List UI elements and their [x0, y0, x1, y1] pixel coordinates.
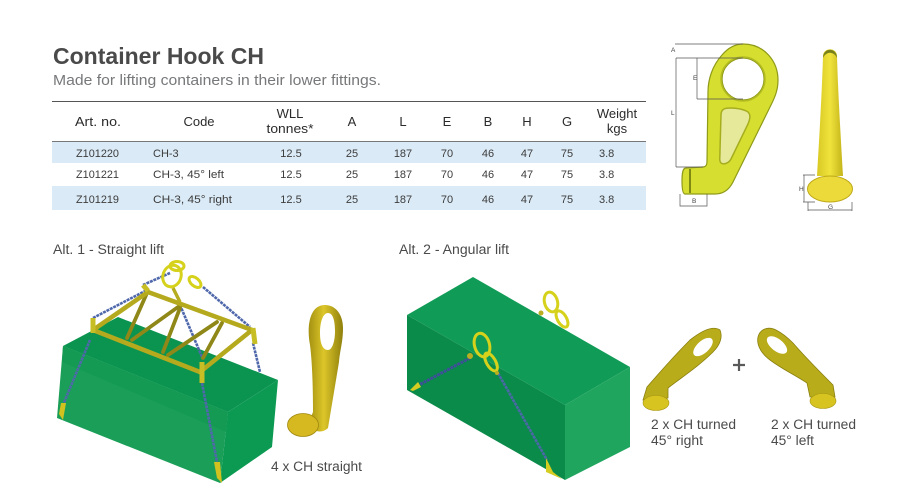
icon: hook turned 45 degrees left [758, 328, 836, 408]
table row Z101220: 187 [394, 148, 412, 160]
table row Z101221: CH-3, 45° left [153, 169, 224, 181]
dimension lines [799, 175, 852, 211]
dimension lines: L [671, 110, 675, 117]
diagram: angular lift [407, 277, 630, 480]
table row Z101219: 25 [346, 194, 358, 206]
table row Z101221: 25 [346, 169, 358, 181]
table row Z101220: 75 [561, 148, 573, 160]
caption: 2 x CH turned 45 right [651, 417, 736, 448]
caption: 2 x CH turned 45 left [771, 417, 856, 448]
table row Z101221: Z101221 [76, 169, 119, 181]
heading: alt 1: Alt. 1 - Straight lift [53, 242, 164, 257]
table row Z101221: 75 [561, 169, 573, 181]
caption: 2 x CH turned 45 right: 2 x CH turned [651, 417, 736, 432]
table row Z101219: 47 [521, 194, 533, 206]
table header: Art. no. [75, 114, 121, 129]
table row Z101219: CH-3, 45° right [153, 194, 232, 206]
dimension lines: H [799, 186, 804, 193]
rear lifting rings [538, 291, 570, 329]
front lifting rings [467, 331, 500, 375]
dimension lines [671, 44, 743, 206]
table row Z101220 [76, 148, 614, 160]
table header [75, 106, 637, 136]
caption: 2 x CH turned 45 left: 2 x CH turned [771, 417, 856, 432]
subtitle: Made for lifting containers in their lower fittings. [53, 72, 381, 89]
table row Z101221: 187 [394, 169, 412, 181]
diagram: straight lift with spreader beam [57, 262, 278, 483]
table row Z101221 [76, 169, 614, 181]
plus sign [733, 359, 745, 371]
table row Z101221: 12.5 [280, 169, 302, 181]
spreader beam [93, 292, 252, 372]
table row Z101219: 46 [482, 194, 494, 206]
table header: G [562, 114, 572, 129]
table row Z101220: 12.5 [280, 148, 302, 160]
table header: tonnes* [266, 121, 314, 136]
caption: 2 x CH turned 45 right: 45° right [651, 433, 703, 448]
lifting rings [93, 262, 255, 383]
heading: alt 2: Alt. 2 - Angular lift [399, 242, 509, 257]
table row Z101219: Z101219 [76, 194, 119, 206]
table row Z101220: Z101220 [76, 148, 119, 160]
title: Container Hook CH [53, 43, 264, 69]
table row Z101221: 47 [521, 169, 533, 181]
table header: Code [183, 114, 215, 129]
table row Z101219: 3.8 [599, 194, 614, 206]
table row Z101220: CH-3 [153, 148, 179, 160]
table header: Weight [597, 106, 637, 121]
table row Z101220: 47 [521, 148, 533, 160]
container [407, 277, 630, 480]
table header: L [399, 114, 407, 129]
table row Z101219: 12.5 [280, 194, 302, 206]
table row Z101219: 187 [394, 194, 412, 206]
icon: hook turned 45 degrees right [643, 328, 721, 410]
table row Z101219 [76, 194, 614, 206]
table header: H [522, 114, 532, 129]
table row Z101221: 46 [482, 169, 494, 181]
container [57, 317, 278, 483]
chains [63, 273, 260, 462]
table row Z101221: 70 [441, 169, 453, 181]
dimension lines: G [828, 204, 833, 211]
caption: 2 x CH turned 45 left: 45° left [771, 433, 814, 448]
dimension lines: A [671, 47, 676, 54]
table header: kgs [607, 121, 628, 136]
table row Z101219: 70 [441, 194, 453, 206]
container hooks [410, 382, 562, 479]
icon: straight container hook [288, 305, 343, 436]
table header: B [484, 114, 492, 129]
dimension lines: B [692, 198, 696, 205]
table row Z101220: 46 [482, 148, 494, 160]
chains [417, 358, 547, 460]
table row Z101220: 25 [346, 148, 358, 160]
specification table [52, 102, 646, 210]
dimension lines: E [693, 75, 698, 82]
table header: A [348, 114, 357, 129]
diagram: hook front view with dimensions [799, 49, 852, 211]
container hooks [59, 403, 222, 483]
table row Z101220: 70 [441, 148, 453, 160]
table header: WLL [277, 106, 303, 121]
diagram: hook side view with dimensions [671, 44, 778, 206]
table row Z101219: 75 [561, 194, 573, 206]
table row Z101220: 3.8 [599, 148, 614, 160]
caption: 4 x CH straight: 4 x CH straight [271, 459, 362, 474]
table row Z101221: 3.8 [599, 169, 614, 181]
table header: E [443, 114, 452, 129]
